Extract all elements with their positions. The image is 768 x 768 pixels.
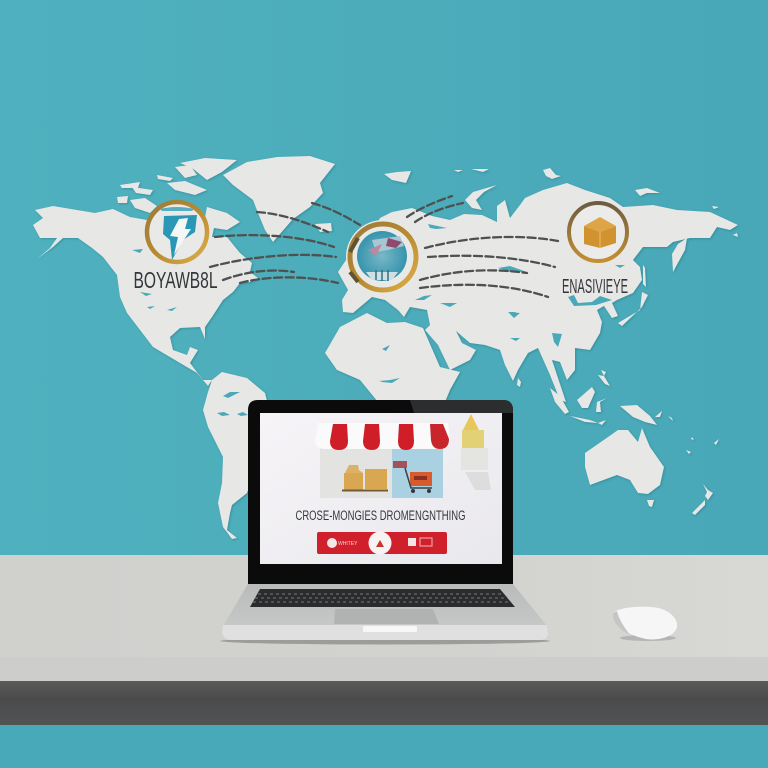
map: New Zealand [692,484,713,515]
map: Eurasia [338,183,738,402]
map: lakes and inland seas [132,224,625,416]
label: left badge: BOYAWB8L [134,267,218,293]
icon: parcel badge [569,203,627,261]
map: Novaya Zemlya spit [465,185,497,210]
map: Africa [325,313,460,402]
storefront illustration [315,423,450,498]
map: Iceland and small islands [315,168,738,237]
map: Tasmania [647,500,654,507]
routes: America to Europe [210,203,360,283]
desk front edge [0,681,768,726]
map: Sri Lanka [517,378,521,387]
bezel reflection [410,400,513,413]
map: South-East Asia islands [550,370,719,454]
desk top [0,555,768,682]
icon: lightning badge [147,202,207,262]
store window left [320,447,392,498]
shop tag graphic [461,414,491,490]
laptop base [222,584,548,640]
cardboard boxes [342,465,388,492]
map: Greenland [223,156,335,242]
map: Kamchatka and Sakhalin [643,238,687,287]
store window right [392,447,443,498]
trackpad [334,609,439,624]
teal floor band [0,725,768,768]
map: Australia [585,428,664,494]
dashed route lines [210,196,558,297]
mouse [613,607,677,641]
routes: Europe to Asia [407,196,558,297]
red action bar [317,532,447,554]
map: Japan [618,292,648,326]
laptop [220,400,550,644]
teal wall background [0,0,768,556]
screen headline: CROSE-MONGIES DROMENGNTHING [296,508,466,523]
keyboard [250,589,515,607]
laptop shadow [220,638,550,644]
laptop front lip [222,625,548,640]
map: North America [33,205,258,386]
map: Arctic Canada islands [117,158,237,213]
laptop screen bezel [248,400,513,584]
shopping cart [393,461,432,493]
map: South America [203,372,272,539]
desk lower strip [0,657,768,682]
laptop screen [260,413,502,564]
label: right badge: ENASIVIEYE [562,276,628,298]
world map [33,156,738,539]
awning [315,423,450,450]
red action bar: WHITEY [338,541,358,547]
front notch [363,626,417,632]
icon: globe badge [346,220,420,294]
